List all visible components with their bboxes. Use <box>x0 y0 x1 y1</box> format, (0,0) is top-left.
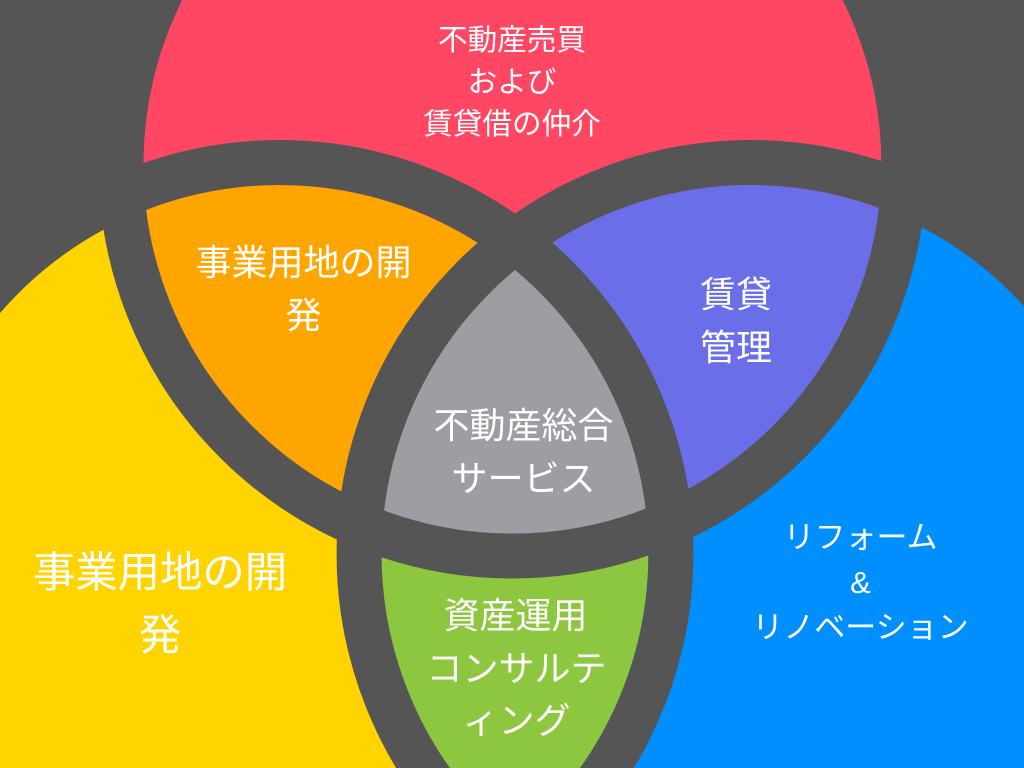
label: right blue <box>752 520 969 645</box>
label: green <box>426 595 607 741</box>
overlap: gray center <box>384 270 646 534</box>
label: orange: 発 <box>285 295 322 336</box>
label: left yellow: 発 <box>139 612 181 659</box>
label: purple <box>700 274 772 368</box>
label: purple: 管理 <box>700 327 772 368</box>
label: orange: 事業用地の開 <box>195 242 412 283</box>
label: green: 資産運用 <box>443 595 588 636</box>
circle: top red <box>143 0 881 534</box>
label: top red <box>423 24 601 141</box>
label: top red: および <box>468 66 556 99</box>
label: purple: 賃貸 <box>700 274 772 315</box>
label: center gray <box>433 405 614 499</box>
label: left yellow <box>33 549 287 659</box>
overlap: green left and right <box>382 270 648 768</box>
label: right blue: & <box>850 565 871 600</box>
label: green: ィング <box>462 700 571 741</box>
label: orange <box>195 242 412 336</box>
label: top red: 賃貸借の仲介 <box>423 108 601 141</box>
label: left yellow: 事業用地の開 <box>33 549 287 596</box>
circle: right blue <box>382 185 1024 768</box>
ring: left circle outline <box>0 162 671 768</box>
label: center gray: 不動産総合 <box>433 405 614 446</box>
ring: right circle outline <box>359 162 1024 768</box>
ring: top circle outline <box>121 0 904 556</box>
label: top red: 不動産売買 <box>438 24 586 57</box>
overlap: orange top and left <box>146 185 514 510</box>
label: right blue: リノベーション <box>752 610 969 645</box>
overlap: purple top and right <box>384 185 879 510</box>
label: green: コンサルテ <box>426 648 607 689</box>
label: right blue: リフォーム <box>783 520 938 555</box>
label: center gray: サービス <box>451 458 596 499</box>
circle: left yellow <box>0 185 648 768</box>
